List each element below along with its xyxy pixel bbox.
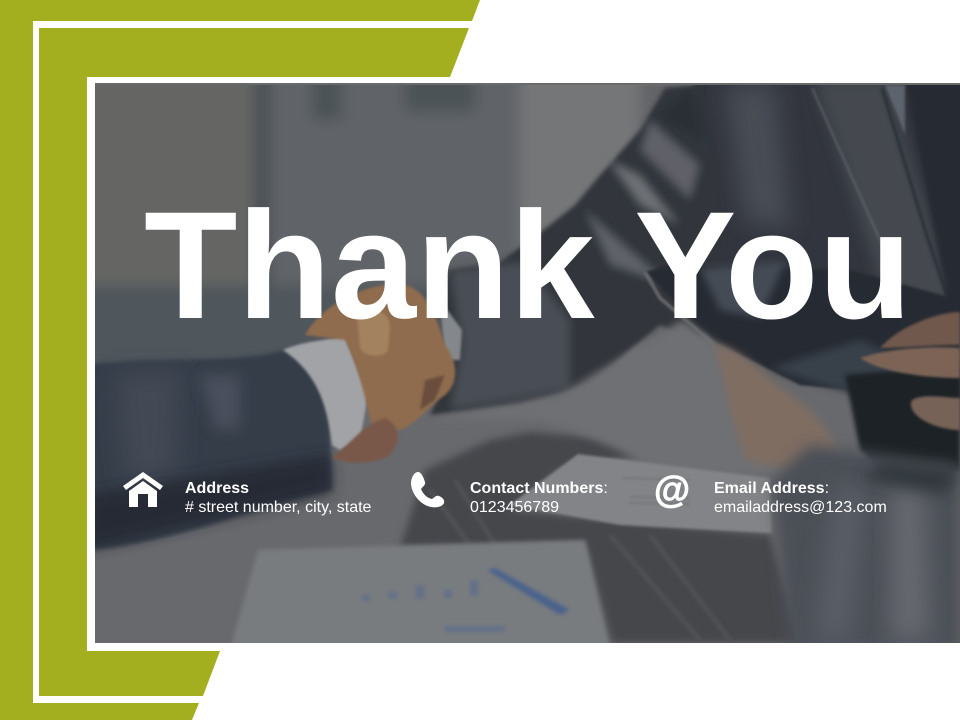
handshake hands [305, 284, 455, 463]
left person sleeve [85, 350, 332, 550]
sheet lines [622, 478, 690, 504]
white shirt cuff [283, 335, 368, 450]
tablet [645, 262, 960, 400]
address value: # street number, city, state [185, 499, 372, 516]
dark table surface [400, 432, 800, 643]
sheet of paper, centre [510, 454, 772, 533]
icon: at sign: @ [654, 469, 690, 510]
contact value: 0123456789 [470, 499, 559, 516]
email text: Email Address: [714, 480, 829, 497]
icon: house [123, 472, 163, 507]
contact text: Contact Numbers: [470, 480, 608, 497]
photo: business handshake, darkened [80, 70, 960, 660]
table sheen streaks [430, 480, 730, 640]
email value: emailaddress@123.com [714, 499, 887, 516]
hand holding tablet, phone [716, 310, 960, 472]
bottom document [230, 540, 610, 650]
address block [123, 472, 249, 507]
icon: phone [411, 472, 444, 507]
right cuff [440, 300, 462, 360]
right person sleeve [430, 85, 725, 415]
green frame background [0, 0, 480, 720]
title: Thank You [144, 180, 912, 351]
right person lower sleeve [772, 445, 960, 650]
address text: Address [185, 480, 249, 497]
background blurred office [95, 85, 641, 364]
email block [654, 469, 829, 510]
right person suit [692, 85, 960, 344]
contact block [411, 472, 608, 507]
paper under tablet [461, 318, 726, 458]
